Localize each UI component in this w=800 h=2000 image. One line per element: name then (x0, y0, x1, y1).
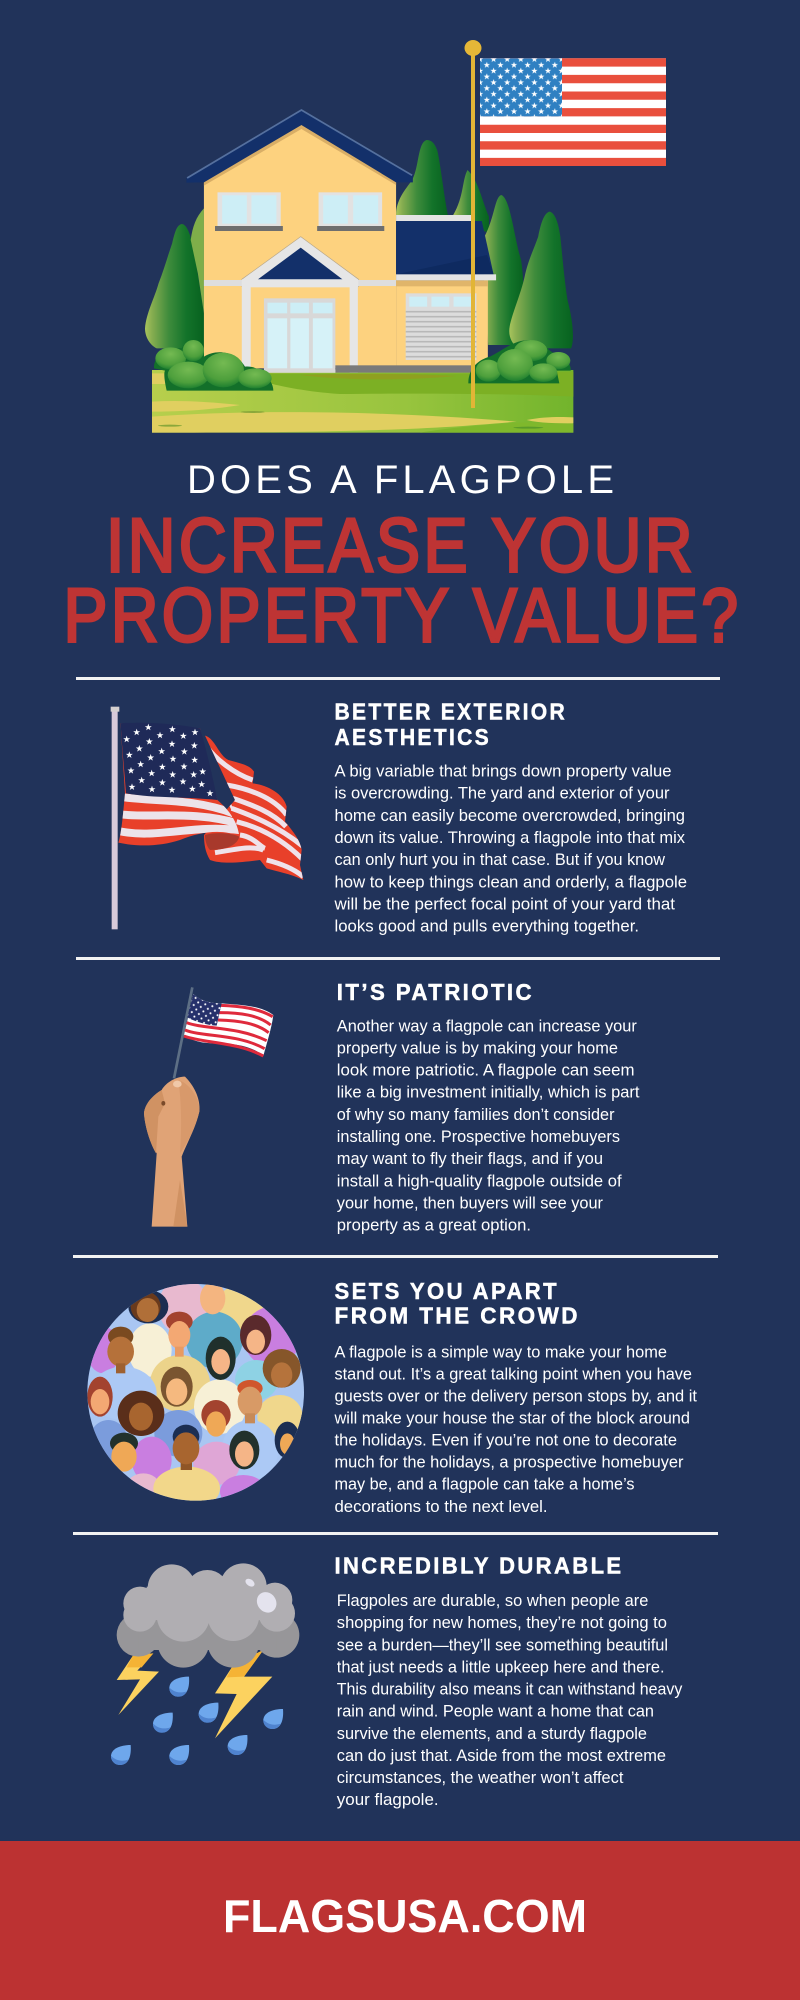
text block (334, 762, 687, 935)
text block: survive the elements, and a sturdy flagpole (337, 1724, 647, 1743)
flagpole (464, 40, 482, 408)
text block: that just needs a little upkeep here and there. (337, 1657, 664, 1676)
text block: can do just that. Aside from the most extreme (337, 1746, 666, 1765)
panel: it's patriotic (144, 979, 640, 1235)
icon: bushes (154, 340, 571, 391)
title (64, 458, 742, 658)
text block: will make your house the star of the block around (334, 1409, 690, 1428)
headline (64, 504, 742, 658)
cloud (117, 1563, 299, 1668)
text block: installing one. Prospective homebuyers (337, 1127, 620, 1146)
text block: property value is by making your home (337, 1039, 618, 1058)
text block: may be, and a flagpole can take a home’s (334, 1475, 634, 1494)
text block: look more patriotic. A flagpole can seem (337, 1060, 634, 1079)
heading (334, 698, 567, 750)
text block: home can easily become overcrowded, bringing (334, 806, 685, 825)
text block: how to keep things clean and orderly, a flagpole (334, 872, 687, 891)
house: garage wing (264, 215, 496, 373)
text block: shopping for new homes, they’re not going to (337, 1613, 667, 1632)
footer website text: FLAGSUSA.COM (223, 1890, 587, 1942)
icon: hand holding flag (144, 987, 273, 1227)
heading (334, 1278, 580, 1329)
house: upper windows (215, 192, 384, 231)
heading: IT’S PATRIOTIC (337, 979, 534, 1005)
flag stripes (480, 58, 666, 166)
text block (334, 1342, 697, 1516)
icon: flagpole with US flag (464, 40, 666, 408)
rain drops (111, 1677, 283, 1765)
panel: sets you apart from the crowd (87, 1278, 697, 1516)
text block (337, 1591, 683, 1809)
heading: FROM THE CROWD (334, 1303, 580, 1329)
footer banner (0, 1841, 800, 2000)
text block (337, 1016, 640, 1235)
text block: looks good and pulls everything together. (334, 916, 639, 935)
text block: much for the holidays, a prospective homebuyer (334, 1452, 684, 1472)
heading: BETTER EXTERIOR (334, 698, 567, 724)
text block: of why so many families don’t consider (337, 1105, 615, 1124)
text block: Another way a flagpole can increase your (337, 1016, 637, 1035)
text block: may want to fly their flags, and if you (337, 1149, 603, 1168)
text block: Flagpoles are durable, so when people are (337, 1591, 648, 1610)
text block: is overcrowding. The yard and exterior of your (334, 783, 670, 802)
house: porch and door (204, 237, 396, 373)
text block: your home, then buyers will see your (337, 1194, 603, 1213)
icon: waving US flag on pole (111, 707, 303, 929)
text block: This durability also means it can withstand heavy (337, 1679, 683, 1698)
panel: better exterior aesthetics (111, 698, 687, 935)
divider lines (73, 677, 720, 1535)
text block: your flagpole. (337, 1790, 439, 1809)
text block: property as a great option. (337, 1216, 531, 1235)
panel: incredibly durable (111, 1553, 683, 1809)
text block: A flagpole is a simple way to make your home (334, 1342, 667, 1362)
text block: guests over or the delivery person stops by, and it (334, 1386, 697, 1405)
illustration: house with flagpole (145, 109, 573, 433)
lightning bolts (117, 1650, 272, 1738)
heading: AESTHETICS (334, 724, 491, 750)
text block: decorations to the next level. (334, 1497, 548, 1516)
icon: storm cloud with lightning and rain (111, 1563, 299, 1765)
text block: like a big investment initially, which is part (337, 1082, 640, 1102)
text block: circumstances, the weather won’t affect (337, 1768, 624, 1787)
icon: crowd of people in circle (87, 1278, 307, 1510)
headline: INCREASE YOUR (106, 504, 696, 588)
text block: will be the perfect focal point of your yard that (334, 894, 675, 913)
text block: install a high-quality flagpole outside of (337, 1171, 622, 1190)
text block: rain and wind. People want a home that can (337, 1701, 654, 1720)
text block: can only hurt you in that case. But if you know (334, 850, 666, 869)
subtitle line: DOES A FLAGPOLE (187, 458, 614, 502)
house: main wall and roof (186, 109, 413, 368)
text block: stand out. It’s a great talking point when you have (334, 1364, 692, 1383)
text block: the holidays. Even if you’re not one to decorate (334, 1431, 677, 1450)
icon: trees behind house (145, 140, 573, 348)
text block: see a burden—they’ll see something beautiful (337, 1635, 668, 1654)
text block: down its value. Throwing a flagpole into that mix (334, 828, 685, 847)
heading: SETS YOU APART (334, 1278, 559, 1304)
heading: INCREDIBLY DURABLE (334, 1553, 624, 1579)
ground: lawn (152, 370, 573, 433)
text block: A big variable that brings down property value (334, 762, 672, 781)
